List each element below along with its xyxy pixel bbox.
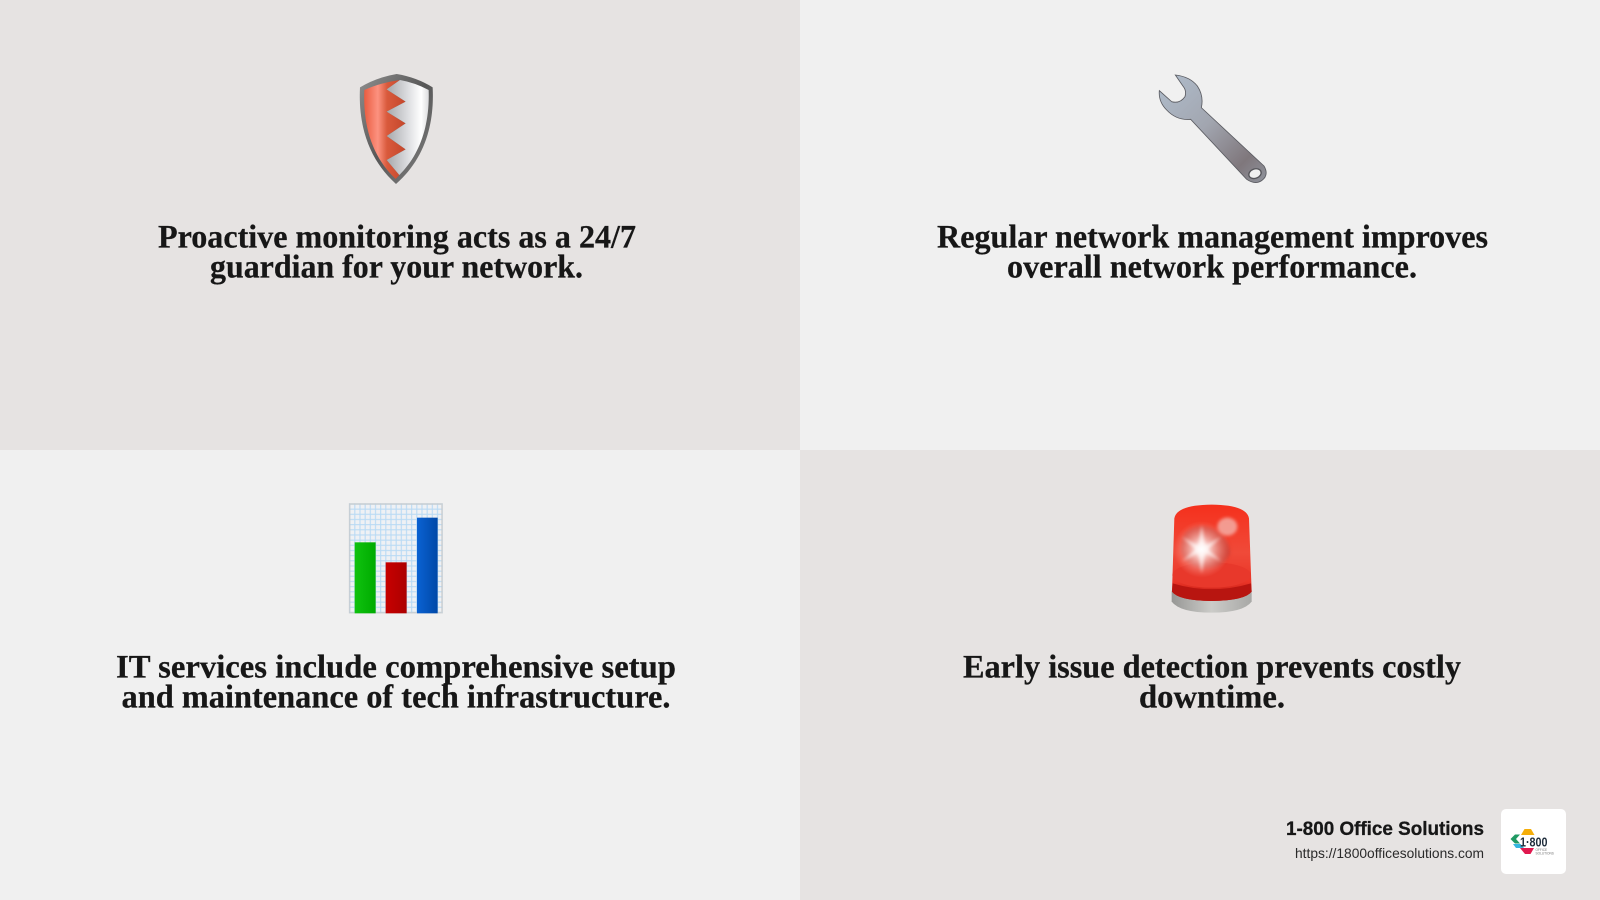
- panel: network management: [800, 0, 1600, 450]
- panel: proactive monitoring: [0, 0, 800, 450]
- heading: network management: overall network performance.: [1007, 250, 1417, 286]
- panel: early detection: [800, 450, 1600, 900]
- heading: IT services: [116, 650, 676, 716]
- heading: early detection: Early issue detection prevents costly: [963, 650, 1461, 686]
- icon: wrench: [1159, 75, 1266, 183]
- heading: network management: [937, 220, 1488, 286]
- logo: [1501, 809, 1566, 874]
- logo: SOLUTIONS: [1536, 852, 1554, 856]
- logo: 1·800: [1520, 834, 1548, 850]
- logo: OFFICE: [1536, 848, 1547, 852]
- brand name: 1-800 Office Solutions: [1286, 818, 1484, 840]
- heading: IT services: IT services include comprehensive setup: [116, 650, 676, 686]
- brand url: https://1800officesolutions.com: [1295, 845, 1484, 861]
- heading: proactive monitoring: guardian for your network.: [210, 250, 583, 286]
- icon: shield: [360, 74, 433, 184]
- heading: IT services: and maintenance of tech infrastructure.: [122, 680, 670, 716]
- icon: siren: [1172, 505, 1252, 613]
- heading: network management: Regular network management improves: [937, 220, 1488, 256]
- heading: early detection: [963, 650, 1461, 716]
- heading: early detection: downtime.: [1139, 680, 1285, 716]
- heading: proactive monitoring: [158, 220, 636, 286]
- icon: bar chart: [349, 503, 443, 613]
- panel: IT services: [0, 450, 800, 900]
- heading: proactive monitoring: Proactive monitoring acts as a 24/7: [158, 220, 636, 256]
